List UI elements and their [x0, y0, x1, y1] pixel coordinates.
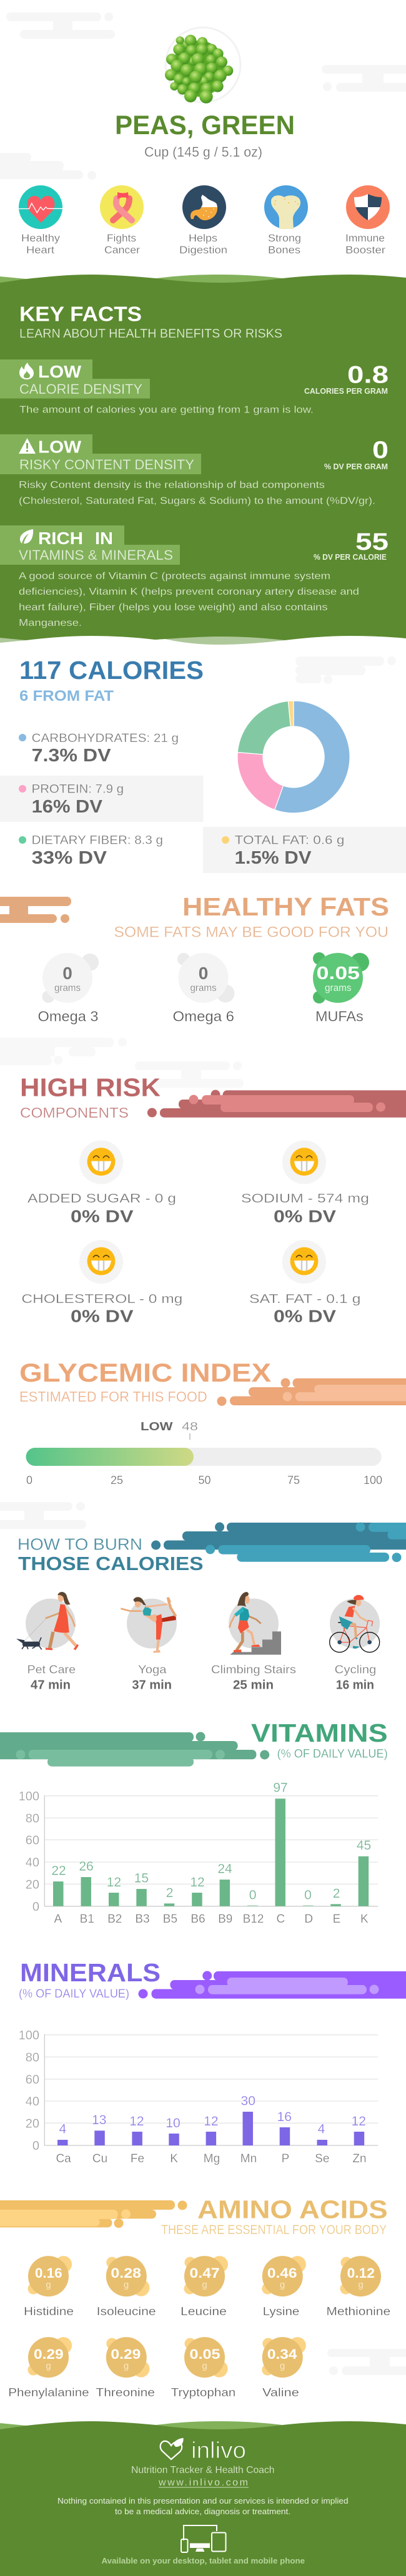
- bar chart: minerals: 10: [166, 2116, 181, 2130]
- bar chart: vitamins: E: [333, 1913, 340, 1926]
- panel: healthy fats: [0, 892, 389, 1025]
- gauge marker: low 48: [141, 1420, 198, 1440]
- amino: histidine: Histidine: [24, 2305, 74, 2318]
- heading: those calories: THOSE CALORIES: [18, 1553, 204, 1574]
- amino: histidine: [24, 2256, 74, 2318]
- icon: helps digestion stomach: [182, 185, 226, 229]
- subheading: healthy fats: SOME FATS MAY BE GOOD FOR YOU: [114, 924, 389, 941]
- bar chart: vitamins: 60: [26, 1833, 39, 1847]
- fact: rich in vitamins and minerals: RICH: [38, 529, 83, 548]
- amino: isoleucine: Isoleucine: [97, 2305, 156, 2318]
- bar chart: minerals: Se: [315, 2152, 329, 2165]
- legend: carbohydrates: 7.3% DV: [32, 746, 111, 766]
- item: cholesterol: 0% DV: [71, 1306, 134, 1325]
- label: immune booster: Immune: [345, 232, 385, 244]
- stat: omega 3: [37, 953, 99, 1025]
- activity: yoga: Yoga: [138, 1663, 167, 1676]
- heading: healthy fats: HEALTHY FATS: [182, 892, 389, 921]
- bar chart: vitamins: 40: [26, 1856, 39, 1870]
- heading: calories: 117 CALORIES: [19, 656, 204, 685]
- fact: calorie density: CALORIE DENSITY: [19, 381, 142, 397]
- item: saturated fat: 0% DV: [274, 1306, 336, 1325]
- label: fights cancer: Fights: [107, 232, 136, 244]
- amino: histidine: g: [46, 2280, 51, 2290]
- fact: risky content density: RISKY CONTENT DENSITY: [19, 457, 194, 472]
- amino: leucine: [181, 2256, 228, 2318]
- availability note: Available on your desktop, tablet and mobile phone: [101, 2556, 305, 2565]
- bar chart: vitamins: 45: [357, 1838, 371, 1853]
- amino: isoleucine: g: [124, 2280, 129, 2290]
- gauge scale: 50: [198, 1474, 211, 1486]
- panel: high risk components: [20, 1073, 406, 1325]
- activity: climbing stairs: [211, 1592, 296, 1692]
- activity: cycling: 16 min: [336, 1679, 374, 1692]
- legend: carbohydrates: CARBOHYDRATES: 21 g: [32, 732, 179, 745]
- gauge marker: low 48: 48: [182, 1420, 198, 1433]
- fact: rich in vitamins and minerals: % DV PER CALORIE: [314, 553, 387, 562]
- gauge marker: low 48: LOW: [141, 1420, 172, 1433]
- bar chart: minerals: Mn: [240, 2152, 257, 2165]
- legend: total fat: [203, 827, 406, 873]
- bar chart: vitamins: 12: [190, 1875, 205, 1890]
- amino: methionine: Methionine: [326, 2305, 390, 2318]
- amino: tryptophan: 0.05: [190, 2346, 220, 2362]
- logo: inlivo: inlivo: [191, 2437, 246, 2463]
- background clouds: header: [0, 12, 406, 180]
- bar chart: minerals: 20: [26, 2117, 39, 2130]
- fact: rich in vitamins and minerals: Manganese.: [19, 618, 82, 628]
- subheading: key facts: LEARN ABOUT HEALTH BENEFITS OR RISKS: [19, 327, 282, 341]
- bar chart: minerals: 0: [32, 2139, 39, 2153]
- item: added sugar: 0% DV: [71, 1207, 134, 1226]
- panel: calories: [0, 656, 406, 873]
- amino: lysine: g: [280, 2280, 285, 2290]
- fact: rich in vitamins and minerals: VITAMINS & MINERALS: [19, 547, 173, 563]
- label: helps digestion: Helps: [189, 232, 217, 244]
- stat: omega 3: grams: [54, 983, 81, 993]
- bar chart: vitamins: 2: [333, 1886, 340, 1901]
- decorative banner: burn: [151, 1523, 406, 1562]
- item: cholesterol: CHOLESTEROL - 0 mg: [21, 1292, 182, 1306]
- bar chart: minerals: 30: [241, 2094, 255, 2108]
- background cloud: burn: [0, 1502, 86, 1529]
- subheading: from fat: 6 FROM FAT: [19, 688, 114, 705]
- stat: omega 3: Omega 3: [37, 1008, 99, 1025]
- fact: calorie density: [0, 359, 389, 416]
- activity: climbing stairs: 25 min: [233, 1679, 274, 1692]
- label: healthy heart: Heart: [26, 244, 54, 256]
- bar chart: minerals: 16: [277, 2110, 292, 2124]
- panel: minerals: [19, 1958, 406, 2165]
- icon: immune booster shield: [346, 185, 390, 229]
- bar chart: minerals: [19, 2029, 378, 2165]
- panel: key facts: [0, 275, 406, 645]
- icon: devices: [181, 2525, 226, 2552]
- amino: leucine: Leucine: [181, 2305, 227, 2318]
- bar chart: vitamins: 15: [134, 1871, 149, 1886]
- bar chart: minerals: 100: [19, 2029, 39, 2042]
- bar chart: vitamins: B2: [107, 1913, 122, 1926]
- activity: pet care: 47 min: [31, 1679, 71, 1692]
- fact: risky content density: 0: [372, 437, 389, 464]
- decorative banner: minerals: [139, 1971, 406, 1999]
- bar chart: vitamins: 26: [79, 1860, 94, 1874]
- panel: vitamins: [0, 1719, 388, 1926]
- panel: glycemic index: [19, 1358, 406, 1486]
- stat: mufas: grams: [325, 983, 352, 993]
- bar chart: vitamins: K: [360, 1913, 369, 1926]
- stat: omega 6: grams: [190, 983, 216, 993]
- fact: calorie density: LOW: [38, 362, 82, 381]
- icon: healthy heart: [19, 185, 62, 229]
- gauge scale: 0: [26, 1474, 32, 1486]
- label: strong bones: Strong: [268, 232, 301, 244]
- stat: omega 6: Omega 6: [172, 1008, 234, 1025]
- bar chart: minerals: P: [282, 2152, 289, 2165]
- disclaimer: to be a medical advice, diagnosis or treatment.: [115, 2507, 290, 2516]
- amino: valine: g: [280, 2361, 285, 2371]
- fact: rich in vitamins and minerals: heart failure), Fiber (helps you lose weight) and also contains: [19, 602, 327, 613]
- amino: isoleucine: 0.28: [111, 2265, 141, 2281]
- subheading: minerals: (% OF DAILY VALUE): [19, 1987, 129, 2001]
- activity: cycling: Cycling: [335, 1663, 376, 1676]
- fact: calorie density: CALORIES PER GRAM: [304, 387, 388, 396]
- fact: rich in vitamins and minerals: A good source of Vitamin C (protects against immune system: [19, 571, 330, 582]
- bar chart: vitamins: 0: [304, 1888, 312, 1903]
- activity: yoga: [121, 1597, 177, 1692]
- bar chart: vitamins: 2: [166, 1886, 173, 1900]
- amino: phenylalanine: [8, 2337, 89, 2399]
- bar chart: vitamins: 100: [19, 1790, 39, 1803]
- fact: rich in vitamins and minerals: IN: [95, 529, 113, 548]
- icon: warning triangle: [19, 438, 36, 454]
- bar chart: minerals: 80: [26, 2051, 39, 2064]
- bar chart: minerals: Ca: [56, 2152, 71, 2165]
- fact: risky content density: LOW: [38, 437, 82, 457]
- stat: omega 6: 0: [199, 964, 208, 983]
- heading: amino acids: AMINO ACIDS: [197, 2195, 388, 2224]
- gauge scale: 25: [111, 1474, 123, 1486]
- title: PEAS, GREEN: [115, 110, 295, 140]
- footer: [0, 2421, 406, 2576]
- bar chart: vitamins: [19, 1781, 378, 1926]
- item: sodium: SODIUM - 574 mg: [241, 1192, 369, 1206]
- amino: valine: [262, 2337, 306, 2399]
- stat: omega 6: [172, 953, 235, 1025]
- bar chart: vitamins: A: [54, 1913, 62, 1926]
- legend: protein: PROTEIN: 7.9 g: [32, 783, 124, 796]
- amino: methionine: 0.12: [347, 2265, 375, 2281]
- heading: minerals: MINERALS: [20, 1958, 161, 1987]
- activity: cycling: [330, 1595, 380, 1692]
- label: healthy heart: [21, 232, 61, 256]
- bar chart: minerals: Zn: [352, 2152, 367, 2165]
- bar chart: vitamins: 0: [32, 1900, 39, 1914]
- bar chart: minerals: 60: [26, 2073, 39, 2087]
- bar chart: minerals: 12: [129, 2114, 144, 2129]
- activity: climbing stairs: Climbing Stairs: [211, 1663, 296, 1676]
- bar chart: vitamins: D: [304, 1913, 313, 1926]
- stat: mufas: 0.05: [317, 964, 360, 983]
- amino: threonine: g: [124, 2361, 129, 2371]
- donut chart: macronutrients: [237, 701, 350, 813]
- legend: carbohydrates: [19, 732, 179, 766]
- bar chart: vitamins: 80: [26, 1812, 39, 1826]
- food photo: green peas on a plate: [165, 27, 240, 104]
- bar chart: vitamins: C: [277, 1913, 285, 1926]
- heading: high risk: HIGH RISK: [20, 1073, 161, 1102]
- bar chart: vitamins: 0: [249, 1888, 256, 1903]
- heading: key facts: KEY FACTS: [19, 302, 142, 326]
- decorative banner: healthy fats: [0, 897, 71, 923]
- heading: glycemic index: GLYCEMIC INDEX: [19, 1358, 271, 1387]
- label: strong bones: Bones: [268, 244, 300, 256]
- label: healthy heart: Healthy: [21, 232, 61, 244]
- legend: total fat: 1.5% DV: [235, 848, 311, 868]
- amino: leucine: g: [202, 2280, 207, 2290]
- label: immune booster: Booster: [345, 244, 385, 256]
- fact: risky content density: % DV PER GRAM: [324, 462, 388, 471]
- bar chart: vitamins: B3: [135, 1913, 150, 1926]
- label: fights cancer: Cancer: [104, 244, 140, 256]
- stat: mufas: MUFAs: [315, 1008, 364, 1025]
- legend: dietary fiber: 33% DV: [32, 848, 107, 868]
- item: added sugar: ADDED SUGAR - 0 g: [27, 1192, 176, 1206]
- bar chart: minerals: Mg: [204, 2152, 220, 2165]
- serving size: Cup (145 g / 5.1 oz): [144, 144, 262, 160]
- amino: methionine: [326, 2256, 390, 2318]
- amino: valine: 0.34: [267, 2346, 297, 2362]
- legend: total fat: TOTAL FAT: 0.6 g: [235, 834, 344, 847]
- amino: threonine: Threonine: [96, 2386, 155, 2399]
- bar chart: vitamins: 12: [107, 1875, 121, 1890]
- background cloud: calories: [295, 656, 396, 684]
- amino: lysine: 0.46: [267, 2265, 297, 2281]
- bar chart: vitamins: B1: [80, 1913, 94, 1926]
- amino: lysine: Lysine: [263, 2305, 299, 2318]
- item: saturated fat: SAT. FAT - 0.1 g: [249, 1292, 361, 1306]
- bar chart: vitamins: 22: [51, 1864, 66, 1878]
- gauge scale: [26, 1474, 382, 1486]
- amino: phenylalanine: g: [46, 2361, 51, 2371]
- fact: rich in vitamins and minerals: [0, 525, 389, 628]
- tagline: Nutrition Tracker & Health Coach: [131, 2465, 275, 2476]
- legend: dietary fiber: [19, 834, 163, 868]
- heading: vitamins: VITAMINS: [251, 1719, 388, 1747]
- bar chart: vitamins: 20: [26, 1878, 39, 1892]
- fact: risky content density: [0, 434, 389, 507]
- item: added sugar: [27, 1141, 176, 1226]
- disclaimer: Nothing contained in this presentation and our services is intended or implied: [57, 2496, 349, 2505]
- bar chart: vitamins: 24: [217, 1862, 232, 1876]
- item: cholesterol: [21, 1240, 182, 1325]
- amino: leucine: 0.47: [190, 2265, 220, 2281]
- activity: yoga: 37 min: [132, 1679, 172, 1692]
- bar chart: minerals: Cu: [92, 2152, 107, 2165]
- fact: risky content density: (Cholesterol, Saturated Fat, Sugars & Sodium) to the amount (%DV/gr).: [19, 496, 375, 507]
- legend: protein: 16% DV: [32, 797, 102, 817]
- decorative banner: vitamins: [0, 1732, 269, 1767]
- amino: histidine: 0.16: [35, 2265, 62, 2281]
- bar chart: minerals: 12: [352, 2114, 366, 2129]
- fact: calorie density: 0.8: [347, 362, 389, 388]
- gauge bar: [26, 1448, 382, 1466]
- legend: dietary fiber: DIETARY FIBER: 8.3 g: [32, 834, 163, 847]
- amino: isoleucine: [97, 2256, 156, 2318]
- label: helps digestion: Digestion: [179, 244, 227, 256]
- fact: calorie density: The amount of calories you are getting from 1 gram is low.: [19, 404, 314, 416]
- background clouds: between fats and risk: [0, 1038, 244, 1088]
- icon: leaf: [20, 529, 33, 544]
- activity: pet care: Pet Care: [27, 1663, 76, 1676]
- label: strong bones: [268, 232, 301, 256]
- amino: tryptophan: [171, 2337, 235, 2399]
- bar chart: vitamins: B9: [218, 1913, 232, 1926]
- bar chart: minerals: 4: [59, 2122, 66, 2136]
- background cloud: amino acids: [327, 2349, 406, 2375]
- bar chart: minerals: 40: [26, 2095, 39, 2109]
- amino: threonine: [96, 2337, 155, 2399]
- amino: phenylalanine: Phenylalanine: [8, 2386, 89, 2399]
- label: fights cancer: [104, 232, 140, 256]
- item: sodium: [241, 1141, 369, 1226]
- disclaimer: [57, 2496, 349, 2516]
- gauge scale: 100: [364, 1474, 382, 1486]
- bar chart: vitamins: B6: [191, 1913, 205, 1926]
- bar chart: minerals: 12: [204, 2114, 219, 2129]
- activity: pet care: [16, 1592, 79, 1692]
- health benefits row: [19, 185, 390, 256]
- heading: how to burn: HOW TO BURN: [17, 1534, 142, 1553]
- amino: lysine: [262, 2256, 306, 2318]
- bar chart: minerals: Fe: [131, 2152, 144, 2165]
- amino: valine: Valine: [262, 2386, 299, 2399]
- amino: tryptophan: Tryptophan: [171, 2386, 235, 2399]
- amino: phenylalanine: 0.29: [34, 2346, 64, 2362]
- bar chart: minerals: 4: [318, 2122, 325, 2136]
- amino: threonine: 0.29: [111, 2346, 141, 2362]
- amino: tryptophan: g: [202, 2361, 207, 2371]
- icon: fights cancer ribbon: [100, 185, 144, 229]
- fact: risky content density: Risky Content density is the relationship of bad components: [19, 480, 325, 490]
- decorative banner: high risk: [147, 1090, 406, 1118]
- label: helps digestion: [179, 232, 227, 256]
- icon: flame: [19, 363, 34, 379]
- fact: rich in vitamins and minerals: deficiencies), Vitamin K (helps prevent coronary artery disease and: [19, 587, 359, 597]
- item: sodium: 0% DV: [274, 1207, 336, 1226]
- bar chart: vitamins: B12: [243, 1913, 264, 1926]
- legend: protein: [0, 776, 204, 822]
- icon: strong bones: [264, 185, 308, 229]
- stat: mufas: [313, 952, 369, 1025]
- amino: methionine: g: [358, 2280, 364, 2290]
- subheading: glycemic index: ESTIMATED FOR THIS FOOD: [19, 1388, 207, 1405]
- panel: amino acids: [0, 2195, 390, 2399]
- gauge scale: 75: [287, 1474, 300, 1486]
- item: saturated fat: [249, 1240, 361, 1325]
- label: immune booster: [345, 232, 385, 256]
- decorative banner: glycemic index: [217, 1378, 406, 1406]
- logo: inlivo: [161, 2437, 246, 2463]
- stat: omega 3: 0: [62, 964, 72, 983]
- fact: rich in vitamins and minerals: 55: [355, 529, 389, 555]
- bar chart: vitamins: 97: [273, 1781, 288, 1795]
- panel: how to burn those calories: [16, 1523, 406, 1692]
- bar chart: vitamins: B5: [163, 1913, 177, 1926]
- website link: www.inlivo.com: [158, 2477, 248, 2488]
- bar chart: minerals: K: [170, 2152, 178, 2165]
- subheading: components: COMPONENTS: [20, 1105, 129, 1121]
- subheading: vitamins: (% OF DAILY VALUE): [277, 1747, 388, 1761]
- bar chart: minerals: 13: [92, 2113, 106, 2127]
- decorative banner: amino acids: [0, 2200, 187, 2228]
